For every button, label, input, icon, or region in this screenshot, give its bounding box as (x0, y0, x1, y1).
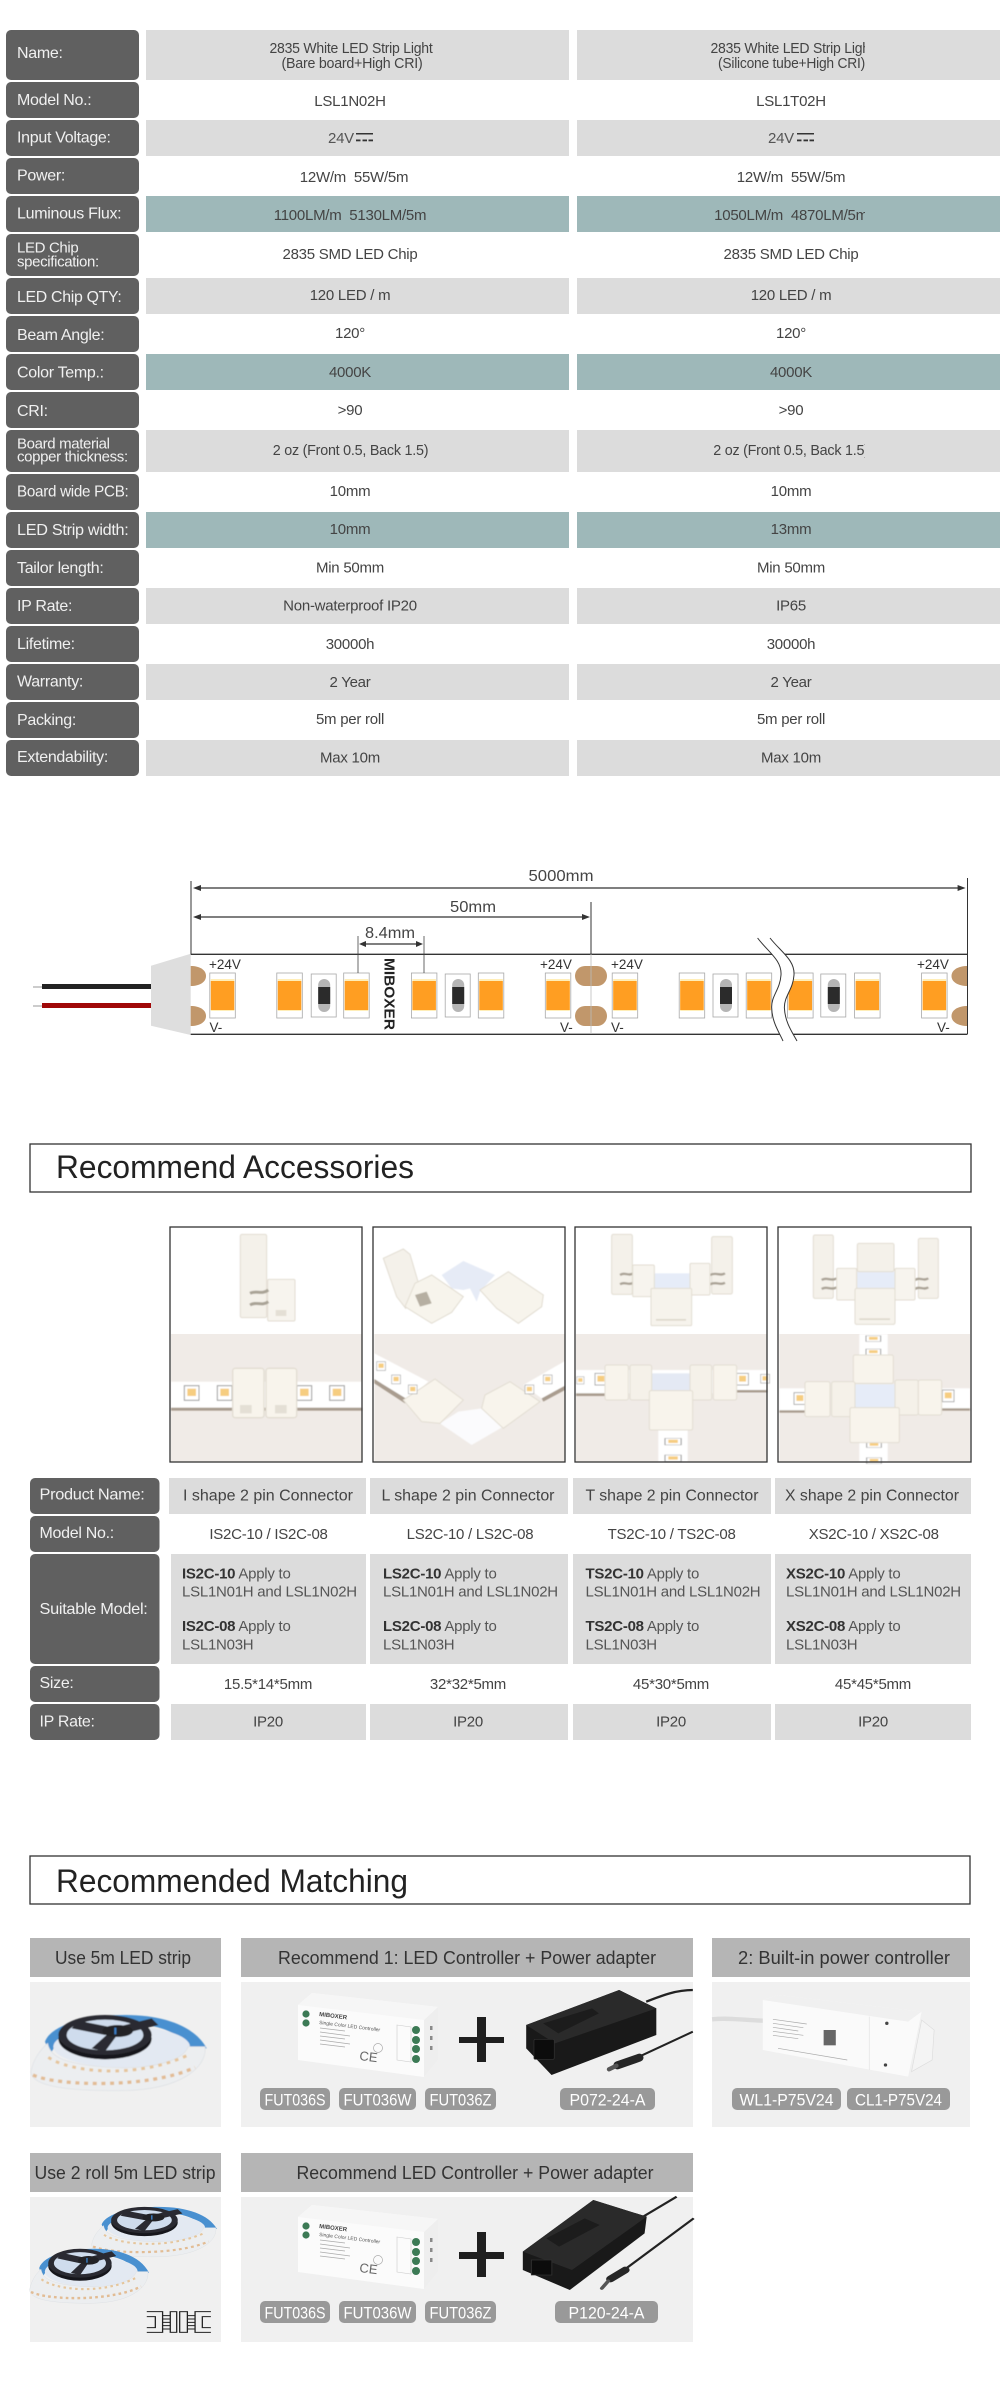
label pills: P072-24-A (570, 2090, 646, 2110)
icon: plus (459, 2232, 504, 2277)
row: luminous flux: 1050LM/m 4870LM/5m (714, 207, 868, 224)
row: board material copper thickness: 2 oz (Front 0.5, Back 1.5) (713, 442, 869, 459)
photo: I shape connector (170, 1227, 362, 1462)
panel: built-in power controller (712, 1938, 970, 2127)
panel: recommend 1 controller and adapter (241, 1938, 693, 2127)
row: suitable model: LS2C-08 Apply to (383, 1618, 497, 1635)
row: CRI: >90 (338, 402, 362, 419)
voltage markings (209, 957, 950, 1035)
accessories table (30, 1478, 971, 1740)
row: size: 32*32*5mm (430, 1676, 506, 1693)
label pills: FUT036Z (430, 2304, 492, 2322)
row: CRI (6, 392, 803, 428)
brand mark on strip: MIBOXER (380, 958, 398, 1030)
row: suitable model: LSL1N03H (182, 1636, 253, 1653)
row: suitable model: LSL1N01H and LSL1N02H (182, 1584, 357, 1601)
row: LED chip quantity: 120 LED / m (310, 287, 390, 304)
voltage markings: +24V (540, 957, 572, 972)
row: input voltage (6, 120, 1000, 156)
row: IP rate: IP Rate: (17, 598, 72, 615)
icon: power adapter (526, 1990, 693, 2075)
row: packing (6, 702, 825, 738)
heading: Recommended Matching: Recommended Matching (56, 1863, 408, 1899)
row: tailor length: Min 50mm (757, 560, 825, 577)
specification table (6, 30, 1000, 776)
row: LED chip quantity: LED Chip QTY: (17, 289, 122, 306)
row: LED strip width: LED Strip width: (17, 522, 128, 539)
icon: power adapter (523, 2197, 694, 2290)
row: IP rate: IP65 (776, 598, 806, 615)
row: board wide PCB: Board wide PCB: (17, 484, 128, 501)
row: LED chip specification: 2835 SMD LED Chip (724, 246, 858, 263)
LED chips (210, 973, 947, 1018)
row: warranty (6, 664, 1000, 700)
row: input voltage: 24V (768, 130, 794, 147)
8.4mm dimension: 8.4mm (365, 925, 415, 942)
row: suitable model: LS2C-10 Apply to (383, 1565, 497, 1582)
row: name: (Silicone tube+High CRI) (718, 55, 865, 72)
row: lifetime (6, 626, 815, 662)
label pills: FUT036S (264, 2090, 326, 2110)
row: CRI: CRI: (17, 403, 48, 420)
row: product name: X shape 2 pin Connector (785, 1488, 959, 1505)
row: suitable model: LSL1N03H (586, 1636, 657, 1653)
row: suitable model: LSL1N01H and LSL1N02H (786, 1584, 961, 1601)
photo: X shape connector (778, 1227, 971, 1464)
icon: two LED strip reels (30, 2207, 217, 2303)
row: suitable model (30, 1554, 971, 1664)
label pills: WL1-P75V24 (740, 2090, 834, 2110)
row: luminous flux (6, 196, 1000, 232)
row: suitable model: TS2C-08 Apply to (586, 1618, 699, 1635)
row: power: 12W/m 55W/5m (300, 169, 408, 186)
row: size (30, 1666, 911, 1702)
row: luminous flux: 1100LM/m 5130LM/5m (274, 207, 426, 224)
row: IP rate: IP20 (253, 1714, 283, 1731)
row: extendability: Max 10m (320, 750, 380, 767)
row: beam angle: 120° (335, 325, 365, 342)
row: model number (30, 1516, 939, 1552)
heading: Recommend Accessories: Recommend Accessories (56, 1149, 414, 1185)
icon: LED strip reel (31, 2015, 207, 2091)
row: warranty: 2 Year (770, 674, 812, 691)
row: product name: L shape 2 pin Connector (382, 1488, 554, 1505)
icon: power wires (33, 984, 151, 1008)
50mm dimension: 50mm (450, 899, 496, 916)
5000mm dimension (191, 868, 968, 1034)
icon: LED controller: CE (359, 2260, 379, 2277)
row: suitable model: LSL1N01H and LSL1N02H (586, 1584, 760, 1601)
row: name: Name: (17, 45, 63, 62)
row: name: 2835 White LED Strip Light (710, 40, 875, 57)
icon: LED controller: Single Color LED Controller (319, 2020, 381, 2034)
row: size: Size: (40, 1675, 74, 1692)
panel: use 5m LED strip: Use 5m LED strip (55, 1948, 191, 1968)
voltage markings: V- (937, 1020, 950, 1035)
row: CRI: >90 (779, 402, 803, 419)
row: suitable model: TS2C-10 Apply to (586, 1565, 699, 1582)
row: extendability (6, 740, 1000, 776)
row: suitable model: IS2C-10 Apply to (182, 1565, 291, 1582)
strip outline (191, 954, 967, 1034)
icon: LED controller: Single Color LED Controller (319, 2232, 381, 2246)
strip break marker (758, 938, 797, 1041)
row: extendability: Extendability: (17, 749, 108, 766)
panel: use 2 roll 5m LED strip: Use 2 roll 5m LED strip (34, 2163, 216, 2183)
row: color temperature: 4000K (770, 364, 812, 381)
icon: wire connector end cap (151, 954, 191, 1035)
row: IP rate: IP20 (453, 1714, 483, 1731)
row: luminous flux: Luminous Flux: (17, 205, 121, 222)
row: model number: Model No.: (40, 1525, 114, 1542)
row: power (6, 158, 845, 194)
icon: LED controller: CE (359, 2048, 379, 2065)
voltage markings: +24V (611, 957, 643, 972)
row: LED chip specification: 2835 SMD LED Chip (283, 246, 417, 263)
row: board material copper thickness: copper thickness: (17, 449, 128, 466)
row: board wide PCB: 10mm (330, 483, 370, 500)
row: color temperature: Color Temp.: (17, 365, 104, 382)
row: IP rate: IP20 (858, 1714, 888, 1731)
row: model number: Model No.: (17, 92, 91, 109)
photo: T shape connector (575, 1227, 769, 1462)
icon: LED controller (298, 2205, 438, 2289)
photo: L shape connector (373, 1227, 565, 1462)
row: input voltage: 24V (328, 130, 354, 147)
row: LED chip specification: LED Chip (17, 240, 78, 257)
row: board material copper thickness: Board material (17, 436, 110, 453)
icon: plus (459, 2017, 504, 2062)
panel: use 5m LED strip (30, 1938, 221, 2127)
row: product name: T shape 2 pin Connector (586, 1488, 758, 1505)
row: tailor length (6, 550, 825, 586)
row: size: 45*30*5mm (633, 1676, 709, 1693)
row: suitable model: LSL1N01H and LSL1N02H (383, 1584, 558, 1601)
row: product name: Product Name: (40, 1486, 144, 1504)
row: LED chip quantity (6, 278, 1000, 314)
row: color temperature (6, 354, 1000, 390)
row: power: 12W/m 55W/5m (737, 169, 845, 186)
row: product name (30, 1478, 971, 1514)
row: product name: I shape 2 pin Connector (183, 1488, 353, 1505)
voltage markings: V- (210, 1020, 222, 1035)
row: suitable model: LSL1N03H (383, 1636, 454, 1653)
row: color temperature: 4000K (329, 364, 371, 381)
row: LED strip width (6, 512, 1000, 548)
row: lifetime: 30000h (767, 636, 815, 653)
heading: Recommend Accessories (30, 1144, 971, 1192)
row: tailor length: Min 50mm (316, 560, 384, 577)
icon: strip joining connector (147, 2312, 211, 2332)
icon: built-in power controller (712, 1995, 934, 2077)
row: IP rate (6, 588, 1000, 624)
icon: LED controller: MIBOXER (319, 2012, 348, 2021)
row: lifetime: Lifetime: (17, 636, 75, 653)
row: suitable model: LSL1N03H (786, 1636, 857, 1653)
row: model number: TS2C-10 / TS2C-08 (608, 1526, 736, 1543)
row: tailor length: Tailor length: (17, 560, 104, 577)
row: name: 2835 White LED Strip Light (270, 40, 434, 57)
row: extendability: Max 10m (761, 750, 821, 767)
row: board wide PCB: 10mm (771, 483, 811, 500)
label pills: FUT036Z (430, 2090, 492, 2110)
row: LED strip width: 10mm (330, 521, 370, 538)
row: LED chip specification: specification: (17, 254, 99, 271)
row: suitable model: XS2C-08 Apply to (786, 1618, 900, 1635)
voltage markings: +24V (209, 957, 241, 972)
row: model number: LSL1T02H (756, 93, 826, 110)
panel: recommend 1 controller and adapter: Recommend 1: LED Controller + Power adapter (278, 1948, 656, 1968)
label pills (260, 2088, 655, 2110)
row: suitable model: Suitable Model: (40, 1601, 148, 1618)
row: packing: 5m per roll (316, 711, 384, 728)
row: lifetime: 30000h (326, 636, 374, 653)
label pills: P120-24-A (568, 2304, 645, 2322)
row: warranty: 2 Year (329, 674, 371, 691)
row: LED chip specification (6, 234, 858, 276)
row: input voltage: Input Voltage: (17, 130, 111, 147)
heading: Recommended Matching (30, 1856, 970, 1904)
label pills: FUT036W (344, 2090, 412, 2110)
row: board material copper thickness: 2 oz (Front 0.5, Back 1.5) (273, 442, 428, 459)
row: power: Power: (17, 168, 65, 185)
row: warranty: Warranty: (17, 674, 83, 691)
icon: LED controller: MIBOXER (319, 2224, 348, 2233)
voltage markings: V- (560, 1020, 573, 1035)
row: suitable model: IS2C-08 Apply to (182, 1618, 291, 1635)
8.4mm dimension (358, 925, 424, 973)
row: name (6, 30, 1000, 80)
row: size: 15.5*14*5mm (224, 1676, 312, 1693)
LED strip dimension diagram (33, 868, 968, 1041)
row: model number: XS2C-10 / XS2C-08 (809, 1526, 939, 1543)
label pills: FUT036W (344, 2304, 412, 2322)
voltage markings: V- (611, 1020, 624, 1035)
row: packing: Packing: (17, 712, 76, 729)
icon: LED controller (298, 1993, 438, 2077)
row: IP rate (30, 1704, 971, 1740)
row: beam angle: 120° (776, 325, 806, 342)
5000mm dimension: 5000mm (528, 868, 594, 885)
row: board material copper thickness (6, 430, 1000, 472)
row: LED strip width: 13mm (771, 521, 811, 538)
panel: built-in power controller: 2: Built-in power controller (738, 1948, 950, 1968)
copper solder pads (191, 966, 967, 1026)
row: model number: IS2C-10 / IS2C-08 (209, 1526, 328, 1543)
row: model number: LSL1N02H (314, 93, 386, 110)
row: suitable model: XS2C-10 Apply to (786, 1565, 900, 1582)
row: IP rate: IP Rate: (40, 1714, 95, 1731)
row: size: 45*45*5mm (835, 1676, 911, 1693)
panel: recommend controller and adapter (241, 2153, 694, 2342)
row: packing: 5m per roll (757, 711, 825, 728)
row: beam angle (6, 316, 806, 352)
row: model number (6, 82, 826, 118)
50mm dimension (193, 899, 591, 1034)
row: LED chip quantity: 120 LED / m (751, 287, 831, 304)
row: model number: LS2C-10 / LS2C-08 (407, 1526, 533, 1543)
row: beam angle: Beam Angle: (17, 327, 104, 344)
row: board wide PCB (6, 474, 811, 510)
row: name: (Bare board+High CRI) (282, 55, 423, 72)
voltage markings: +24V (917, 957, 949, 972)
label pills (260, 2301, 658, 2323)
row: IP rate: IP20 (656, 1714, 686, 1731)
label pills: FUT036S (264, 2304, 326, 2322)
panel: recommend controller and adapter: Recommend LED Controller + Power adapter (296, 2163, 654, 2183)
label pills (732, 2088, 950, 2110)
panel: use 2 roll 5m LED strip (30, 2153, 221, 2342)
label pills: CL1-P75V24 (855, 2090, 942, 2110)
row: IP rate: Non-waterproof IP20 (283, 598, 417, 615)
